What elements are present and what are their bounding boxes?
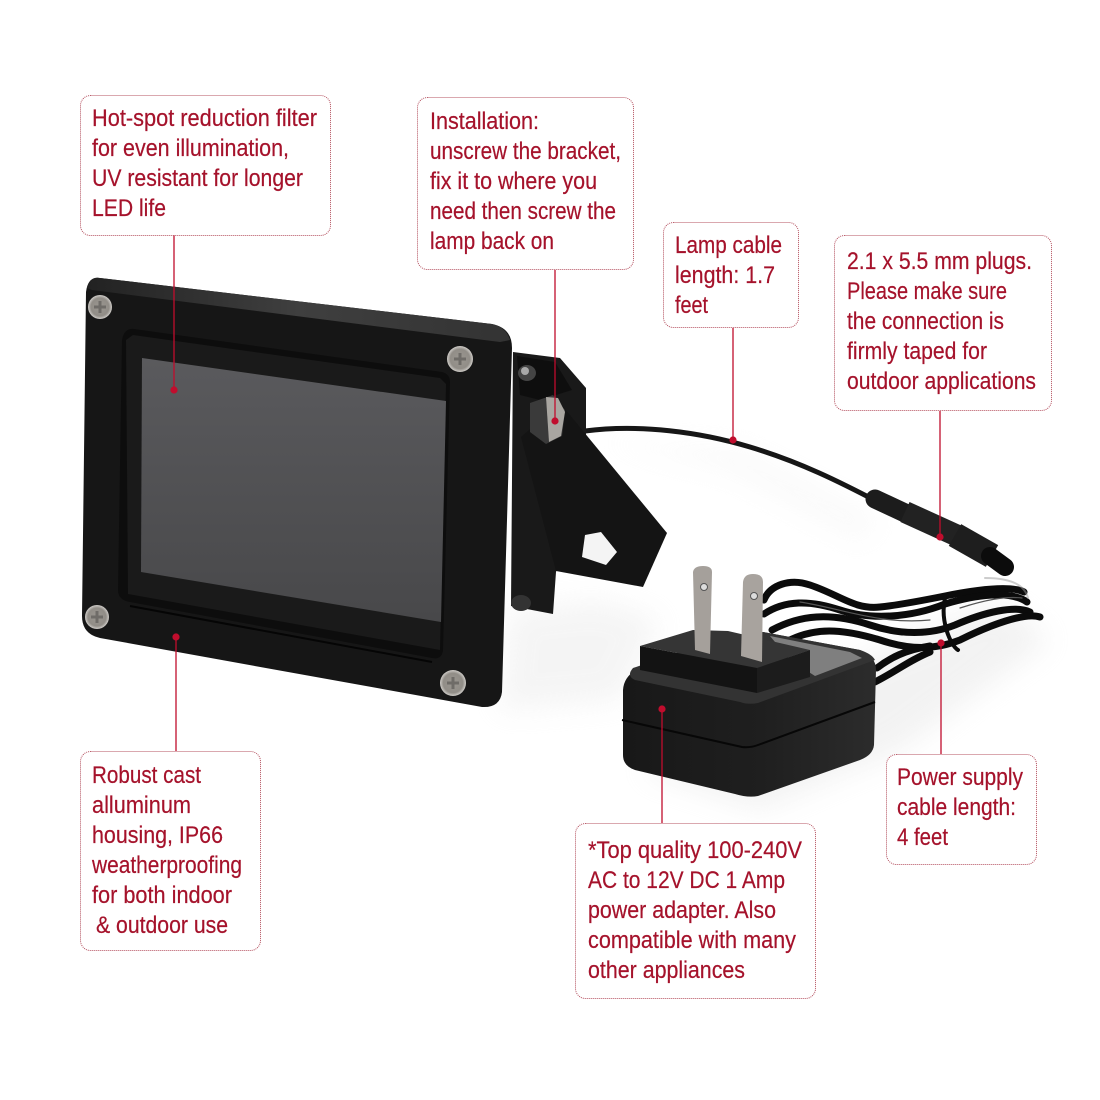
leader lines and dots — [170, 235, 945, 823]
callout: hot-spot filter — [80, 96, 330, 236]
power adapter — [622, 566, 876, 797]
callout: installation: Installation: — [430, 108, 539, 135]
plug prongs — [693, 566, 763, 662]
callout: housing — [80, 752, 260, 950]
callout: plugs: outdoor applications — [847, 368, 1036, 395]
callout: hot-spot filter: for even illumination, — [92, 135, 289, 162]
adapter top face — [630, 632, 875, 704]
hex nut — [530, 395, 565, 444]
inner recess — [118, 329, 450, 658]
callout: power supply cable length: cable length: — [897, 794, 1016, 821]
callout: power adapter: *Top quality 100-240V — [588, 837, 802, 864]
bracket and rear body — [511, 352, 667, 614]
power supply cable coil — [764, 578, 1040, 682]
callout: housing: & outdoor use — [96, 912, 228, 939]
callout: installation: unscrew the bracket, — [430, 138, 621, 165]
callout: housing: Robust cast — [92, 762, 201, 789]
callout: plugs: the connection is — [847, 308, 1004, 335]
callout: power adapter — [576, 824, 816, 998]
callout: hot-spot filter: UV resistant for longer — [92, 165, 303, 192]
callout: housing: housing, IP66 — [92, 822, 223, 849]
callout: plugs — [834, 236, 1052, 410]
callout: lamp cable length: length: 1.7 — [675, 262, 775, 289]
callout: plugs: firmly taped for — [847, 338, 987, 365]
rear bolts — [511, 365, 536, 611]
callout: power adapter: AC to 12V DC 1 Amp — [588, 867, 785, 894]
adapter seam — [622, 702, 875, 747]
callout: plugs: Please make sure — [847, 278, 1007, 305]
callout: installation: need then screw the — [430, 198, 616, 225]
floor shadows — [500, 440, 1050, 810]
callout: power adapter: other appliances — [588, 957, 745, 984]
bracket arm — [521, 403, 667, 587]
callout: lamp cable length — [664, 222, 798, 328]
callout: hot-spot filter: Hot-spot reduction filter — [92, 105, 317, 132]
callout: power adapter: compatible with many — [588, 927, 796, 954]
callout: lamp cable length: Lamp cable — [675, 232, 782, 259]
callout: hot-spot filter: LED life — [92, 195, 166, 222]
lamp cable — [585, 428, 1005, 567]
plug base — [640, 630, 810, 668]
callout: power supply cable length: 4 feet — [897, 824, 948, 851]
callout: installation — [418, 98, 634, 270]
screen filter — [141, 358, 446, 622]
callout: power supply cable length — [886, 754, 1036, 864]
callout: housing: alluminum — [92, 792, 191, 819]
callout: installation: lamp back on — [430, 228, 554, 255]
lamp housing — [82, 278, 512, 707]
callout: housing: weatherproofing — [91, 852, 242, 879]
corner screws — [85, 295, 473, 696]
callout: power adapter: power adapter. Also — [588, 897, 776, 924]
bottom lip highlight — [130, 606, 432, 662]
callout: housing: for both indoor — [92, 882, 232, 909]
callout: lamp cable length: feet — [675, 292, 708, 319]
callout: installation: fix it to where you — [430, 168, 597, 195]
callout: power supply cable length: Power supply — [897, 764, 1023, 791]
inline cable connector — [875, 499, 1005, 567]
callout: plugs: 2.1 x 5.5 mm plugs. — [847, 248, 1032, 275]
